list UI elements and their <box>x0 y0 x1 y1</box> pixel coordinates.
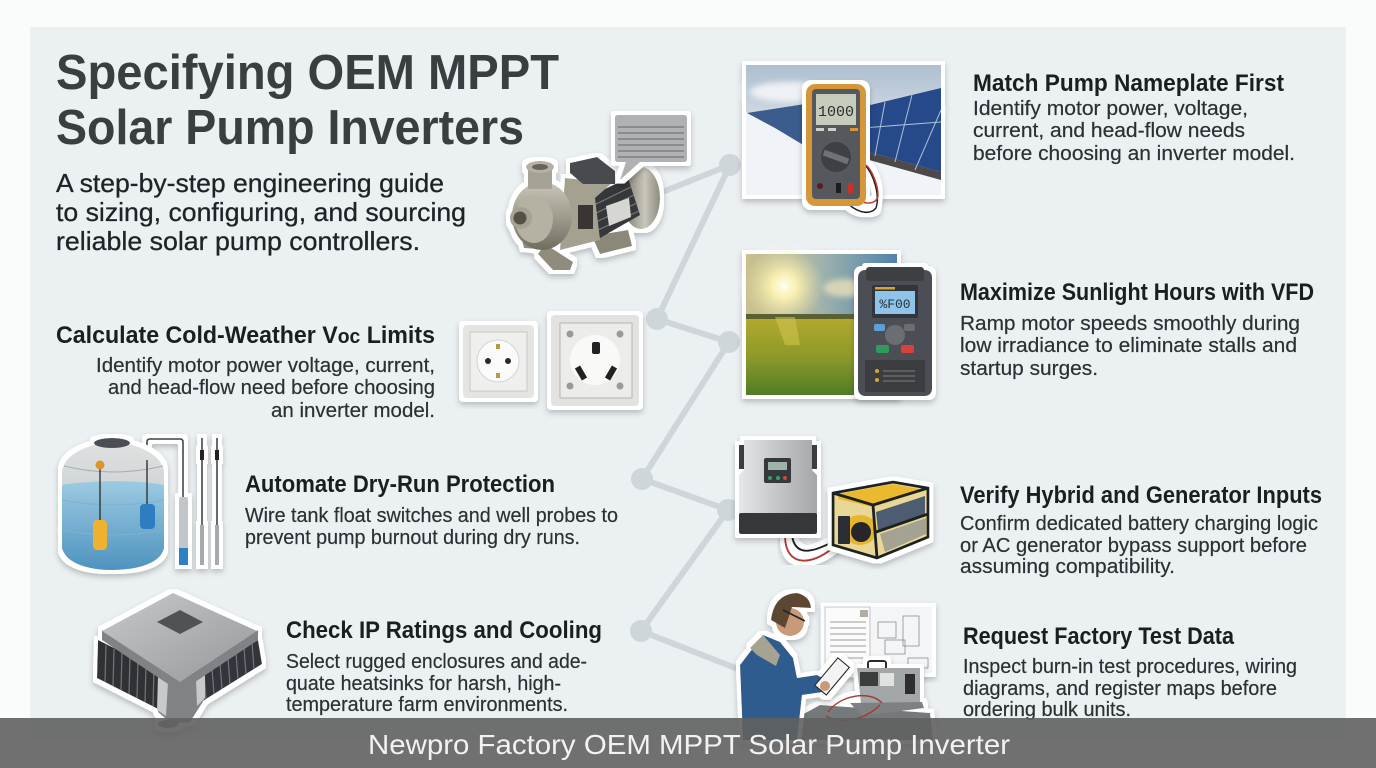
subtitle: reliable solar pump controllers. <box>56 226 420 256</box>
vfd: %F00 <box>879 297 911 312</box>
terminal box <box>570 157 615 184</box>
heading: IP ratings and cooling: temperature farm environments. <box>286 693 568 716</box>
outlet <box>528 167 552 189</box>
cables <box>785 535 836 561</box>
heading: IP ratings and cooling <box>286 617 602 716</box>
heading: hybrid and generator: assuming compatibility. <box>960 555 1175 578</box>
probes and pump <box>147 438 219 565</box>
heading: match pump nameplate <box>973 70 1295 165</box>
meter: 1000 <box>818 104 854 121</box>
title: Solar Pump Inverters <box>56 101 524 155</box>
heading: dry-run protection: Wire tank float switches and well probes to <box>245 504 618 527</box>
icon: finned heatsink enclosure <box>97 593 262 728</box>
subtitle <box>56 168 466 256</box>
heading: factory test data: diagrams, and register maps before <box>963 677 1277 700</box>
heading: match pump nameplate: current, and head-flow needs <box>973 119 1245 142</box>
bench and tester <box>798 661 933 740</box>
icon: engineer with test bench <box>740 593 933 740</box>
heading: dry-run protection <box>245 471 618 549</box>
motor end cap <box>622 167 660 229</box>
caption bar: Newpro Factory OEM MPPT Solar Pump Inverter <box>368 729 1010 760</box>
heading: cold weather voc limits: Calculate Cold-Weather Voc Limits <box>56 322 435 349</box>
large socket <box>551 315 639 406</box>
heading: factory test data: ordering bulk units. <box>963 698 1131 721</box>
heading: cold weather voc limits: an inverter model. <box>271 399 435 422</box>
subtitle: to sizing, configuring, and sourcing <box>56 197 466 227</box>
heading: hybrid and generator <box>960 482 1322 578</box>
heading: hybrid and generator: Verify Hybrid and Generator Inputs <box>960 482 1322 509</box>
heading: IP ratings and cooling: Check IP Ratings and Cooling <box>286 617 602 644</box>
generator <box>833 482 928 558</box>
nameplate callout <box>615 115 687 180</box>
label plate <box>157 610 203 634</box>
hybrid inverter <box>739 440 817 534</box>
lid rim <box>102 630 258 692</box>
heading: cold weather voc limits <box>56 322 435 422</box>
connector path <box>633 157 738 669</box>
heading: maximize sunlight <box>960 279 1314 380</box>
centre block <box>158 672 204 724</box>
title: Specifying OEM MPPT <box>56 46 559 100</box>
heading: factory test data: Request Factory Test Data <box>963 623 1235 650</box>
icon: centrifugal pump with nameplate <box>510 115 687 270</box>
inlet <box>510 207 532 229</box>
heading: maximize sunlight: Maximize Sunlight Hours with VFD <box>960 279 1314 306</box>
heading: maximize sunlight: low irradiance to eliminate stalls and <box>960 334 1297 357</box>
beige mid <box>560 178 612 250</box>
blue float <box>146 460 148 504</box>
heading: factory test data <box>963 623 1297 721</box>
motor ribs <box>590 178 640 238</box>
heading: maximize sunlight: startup surges. <box>960 357 1098 380</box>
meter <box>806 84 878 212</box>
heading: IP ratings and cooling: Select rugged enclosures and ade- <box>286 650 587 673</box>
icon: sun field with VFD <box>744 246 932 396</box>
heading: factory test data: Inspect burn-in test procedures, wiring <box>963 655 1297 678</box>
heading: match pump nameplate: before choosing an inverter model. <box>973 142 1295 165</box>
lid <box>102 593 257 682</box>
fins <box>97 640 170 712</box>
icon: hybrid inverter and generator <box>739 440 928 561</box>
heading: match pump nameplate: Match Pump Nameplate First <box>973 70 1284 97</box>
small socket <box>463 325 534 398</box>
heading: IP ratings and cooling: quate heatsinks for harsh, high- <box>286 672 561 695</box>
heading: maximize sunlight: Ramp motor speeds smoothly during <box>960 312 1300 335</box>
caption bar <box>0 718 1376 768</box>
pump <box>510 157 660 270</box>
heading: dry-run protection: Automate Dry-Run Protection <box>245 471 555 498</box>
feet <box>592 230 632 254</box>
volute <box>512 182 572 250</box>
feet <box>158 720 178 728</box>
photo frame <box>746 65 941 195</box>
heading: match pump nameplate: Identify motor power, voltage, <box>973 97 1248 120</box>
heading: hybrid and generator: or AC generator bypass support before <box>960 534 1307 557</box>
vfd <box>858 267 932 396</box>
heading: hybrid and generator: Confirm dedicated battery charging logic <box>960 512 1318 535</box>
icon: wall sockets <box>463 315 639 406</box>
worker <box>740 593 849 740</box>
motor label <box>606 198 631 226</box>
title <box>56 46 559 155</box>
heading: dry-run protection: prevent pump burnout during dry runs. <box>245 526 580 549</box>
field photo <box>744 246 897 395</box>
yellow float <box>99 465 101 520</box>
tank <box>62 438 164 570</box>
documents <box>825 607 932 673</box>
heading: cold weather voc limits: Identify motor power voltage, current, <box>96 354 435 377</box>
heading: cold weather voc limits: and head-flow need before choosing <box>108 376 435 399</box>
icon: multimeter on snowy solar field photo <box>746 65 941 212</box>
icon: water tank with float switches and probes <box>62 438 219 570</box>
subtitle: A step-by-step engineering guide <box>56 168 444 198</box>
